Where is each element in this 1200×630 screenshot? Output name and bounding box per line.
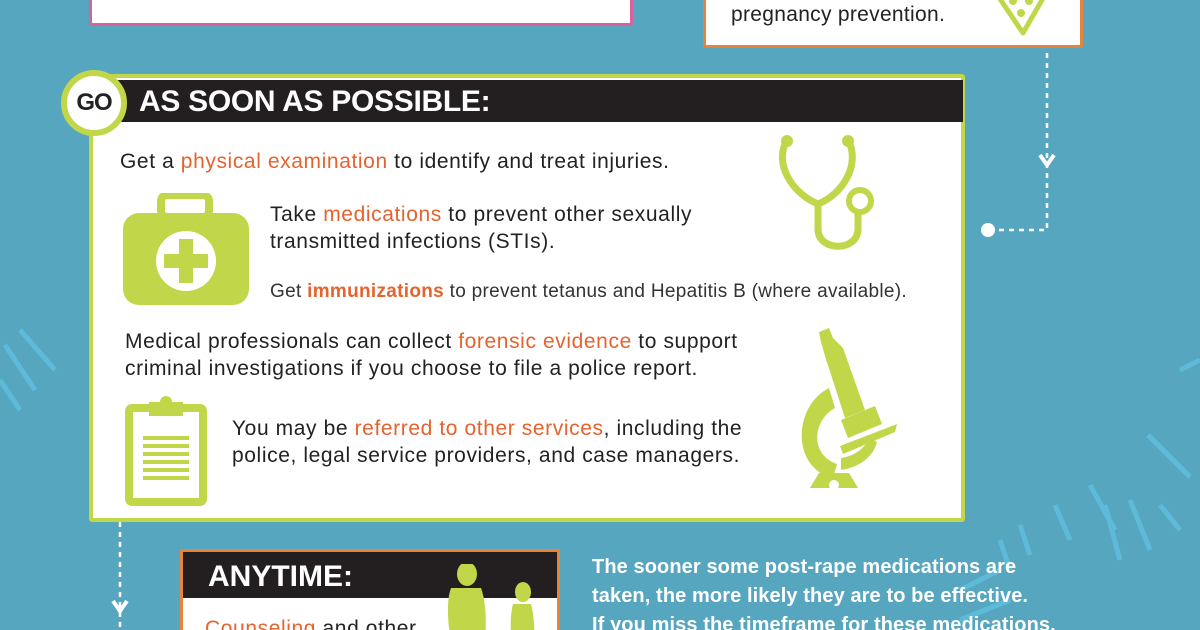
icon: people silhouettes	[448, 564, 534, 630]
panel: pink box top	[89, 0, 633, 26]
text: referred	[232, 417, 742, 467]
arrow: dotted connector left	[111, 522, 129, 627]
heading bar	[113, 80, 963, 122]
text: referred: police, legal service providers, and case managers.	[232, 444, 740, 467]
arrow: dotted connector right	[981, 53, 1056, 237]
text: physical examination: Get a physical examination to identify and treat injuries.	[120, 150, 670, 173]
icon: GO badge: GO	[76, 89, 112, 116]
icon: pill pack	[998, 0, 1045, 36]
icon: clipboard	[125, 396, 207, 506]
text: forensic evidence: Medical professionals can collect forensic evidence to support	[125, 330, 738, 353]
text: forensic evidence	[125, 330, 738, 380]
panel: orange box top right	[703, 0, 1083, 48]
text: medications	[270, 203, 692, 253]
text: forensic evidence: criminal investigations if you choose to file a police report.	[125, 357, 698, 380]
icon: microscope	[802, 328, 897, 488]
heading bar	[183, 552, 557, 598]
text: right note: The sooner some post-rape medications are	[592, 556, 1016, 578]
text: medications: Take medications to prevent other sexually	[270, 203, 692, 226]
text: right note: taken, the more likely they are to be effective.	[592, 585, 1028, 607]
icon: GO badge	[61, 70, 127, 136]
panel: anytime	[180, 549, 560, 630]
icon: stethoscope	[778, 135, 874, 250]
text: right note	[592, 556, 1056, 630]
heading bar: AS SOON AS POSSIBLE:	[139, 85, 490, 118]
text: medications: transmitted infections (STIs).	[270, 230, 555, 253]
text: referred: You may be referred to other services, including the	[232, 417, 742, 440]
icon: first aid kit	[123, 193, 249, 305]
heading bar: ANYTIME:	[208, 560, 353, 593]
text: immunizations: Get immunizations to prevent tetanus and Hepatitis B (where available).	[270, 281, 907, 302]
text: pregnancy prevention: pregnancy prevention.	[731, 3, 945, 26]
panel: as soon as possible	[89, 74, 965, 522]
